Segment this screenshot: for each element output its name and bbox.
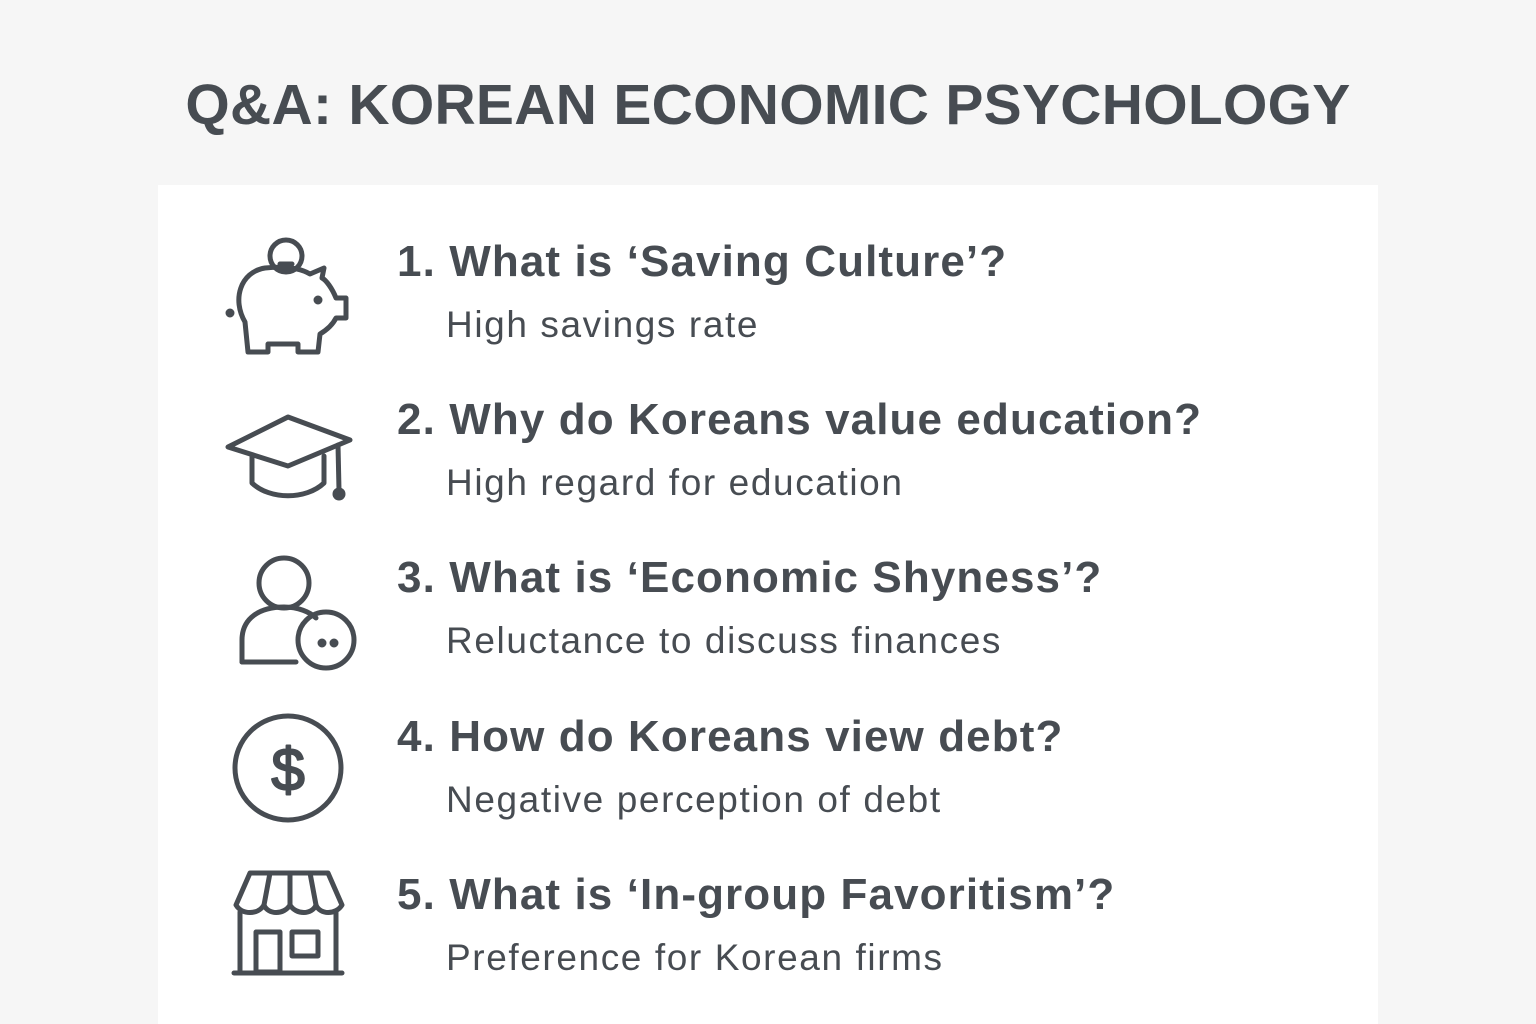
icon: piggy bank — [228, 240, 346, 352]
icon: person with bubble — [242, 558, 354, 668]
question 3: 3. What is ‘Economic Shyness’? — [397, 553, 1102, 602]
answer 1: High savings rate — [446, 304, 759, 345]
answer 5: Preference for Korean firms — [446, 937, 944, 978]
answer 3: Reluctance to discuss finances — [446, 620, 1002, 661]
question 4: 4. How do Koreans view debt? — [397, 712, 1063, 761]
icon: graduation cap — [228, 417, 350, 498]
title: Q&A: KOREAN ECONOMIC PSYCHOLOGY — [185, 73, 1351, 137]
answer 2: High regard for education — [446, 462, 904, 503]
question 2: 2. Why do Koreans value education? — [397, 395, 1202, 444]
icon: storefront — [234, 873, 342, 973]
icon: dollar coin: $ — [271, 736, 305, 803]
question 1: 1. What is ‘Saving Culture’? — [397, 237, 1007, 286]
question 5: 5. What is ‘In-group Favoritism’? — [397, 870, 1115, 919]
panel: questions — [158, 185, 1378, 1024]
answer 4: Negative perception of debt — [446, 779, 942, 820]
icon: dollar coin — [235, 716, 341, 820]
